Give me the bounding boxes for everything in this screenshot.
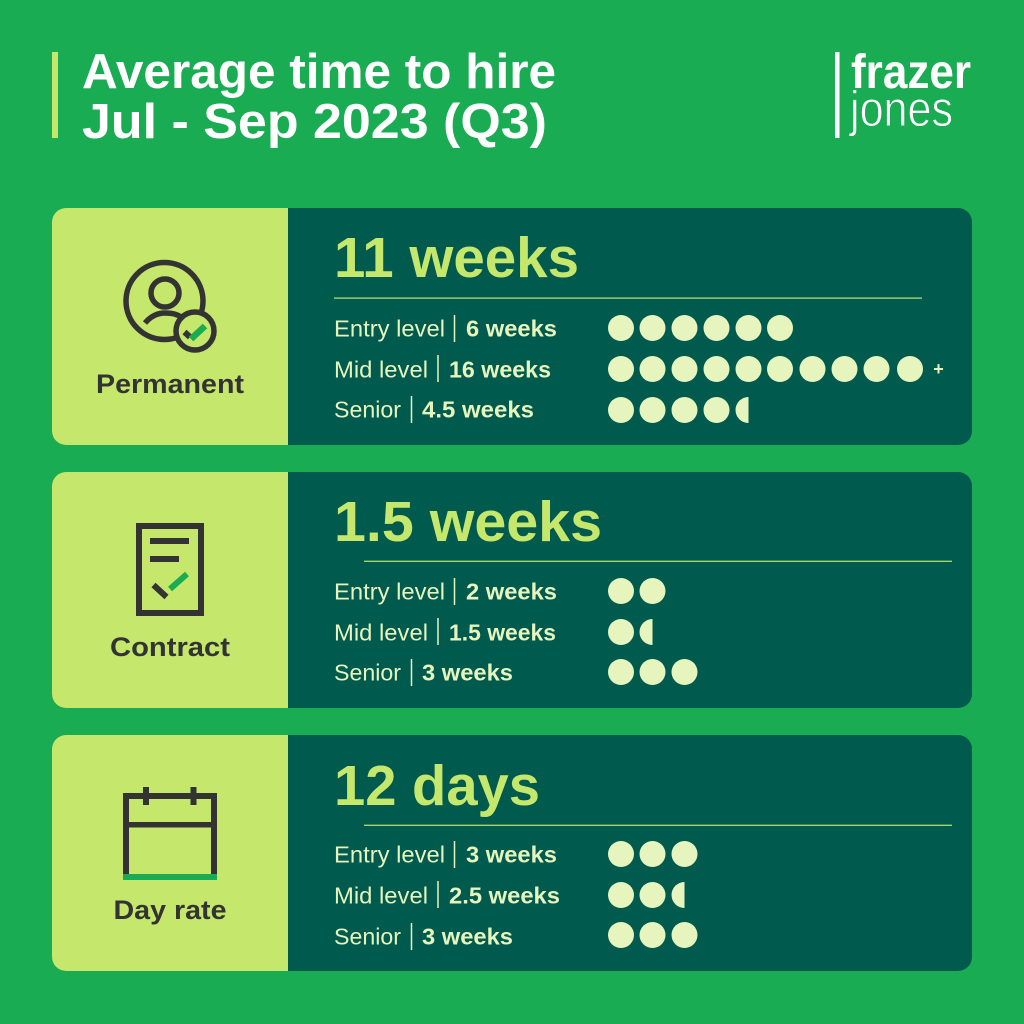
label: permanent: Permanent — [96, 369, 244, 399]
row: mid level 1.5 weeks: Mid level — [334, 620, 428, 646]
icon: document with check — [139, 526, 201, 613]
title: Jul - Sep 2023 (Q3) — [82, 95, 547, 149]
title: Average time to hire — [82, 45, 556, 99]
label: day rate: Day rate — [114, 895, 226, 925]
title — [52, 45, 556, 149]
row: entry level 3 weeks: 3 weeks — [466, 842, 557, 868]
headline: 12 days: 12 days — [334, 754, 540, 818]
row: mid level 2.5 weeks: 2.5 weeks — [449, 882, 560, 908]
row: senior 4.5 weeks: 4.5 weeks — [422, 396, 534, 422]
row: entry level 2 weeks — [334, 578, 666, 605]
icon: calendar — [123, 787, 217, 880]
row: entry level 3 weeks — [334, 841, 698, 868]
row: senior 3 weeks — [334, 659, 698, 686]
panel: contract — [52, 472, 972, 708]
row: entry level 6 weeks — [334, 315, 793, 342]
logo: jones — [848, 81, 953, 137]
row: mid level 16 weeks: 16 weeks — [449, 356, 551, 382]
row: entry level 6 weeks: 6 weeks — [466, 316, 557, 342]
logo — [835, 46, 971, 138]
row: entry level 2 weeks: Entry level — [334, 578, 445, 604]
row: mid level 16 weeks: + — [933, 359, 944, 379]
row: senior 3 weeks: Senior — [334, 924, 401, 950]
panel: permanent — [52, 208, 972, 445]
headline: 1.5 weeks: 1.5 weeks — [334, 490, 602, 554]
row: mid level 2.5 weeks: Mid level — [334, 882, 428, 908]
row: senior 4.5 weeks — [334, 396, 748, 423]
row: entry level 2 weeks: 2 weeks — [466, 578, 557, 604]
icon: person with check — [126, 262, 214, 350]
label: contract: Contract — [110, 632, 230, 662]
headline: 11 weeks: 11 weeks — [334, 226, 579, 290]
row: mid level 16 weeks — [334, 355, 944, 382]
row: mid level 1.5 weeks: 1.5 weeks — [449, 620, 556, 646]
row: senior 3 weeks: 3 weeks — [422, 924, 513, 950]
row: entry level 6 weeks: Entry level — [334, 316, 445, 342]
row: mid level 16 weeks: Mid level — [334, 356, 428, 382]
row: entry level 3 weeks: Entry level — [334, 842, 445, 868]
panel: day rate — [52, 735, 972, 971]
row: senior 3 weeks: 3 weeks — [422, 660, 513, 686]
logo: frazer — [851, 46, 971, 99]
row: mid level 1.5 weeks — [334, 618, 652, 646]
row: senior 4.5 weeks: Senior — [334, 396, 401, 422]
row: senior 3 weeks — [334, 922, 698, 950]
row: senior 3 weeks: Senior — [334, 660, 401, 686]
row: mid level 2.5 weeks — [334, 881, 684, 908]
